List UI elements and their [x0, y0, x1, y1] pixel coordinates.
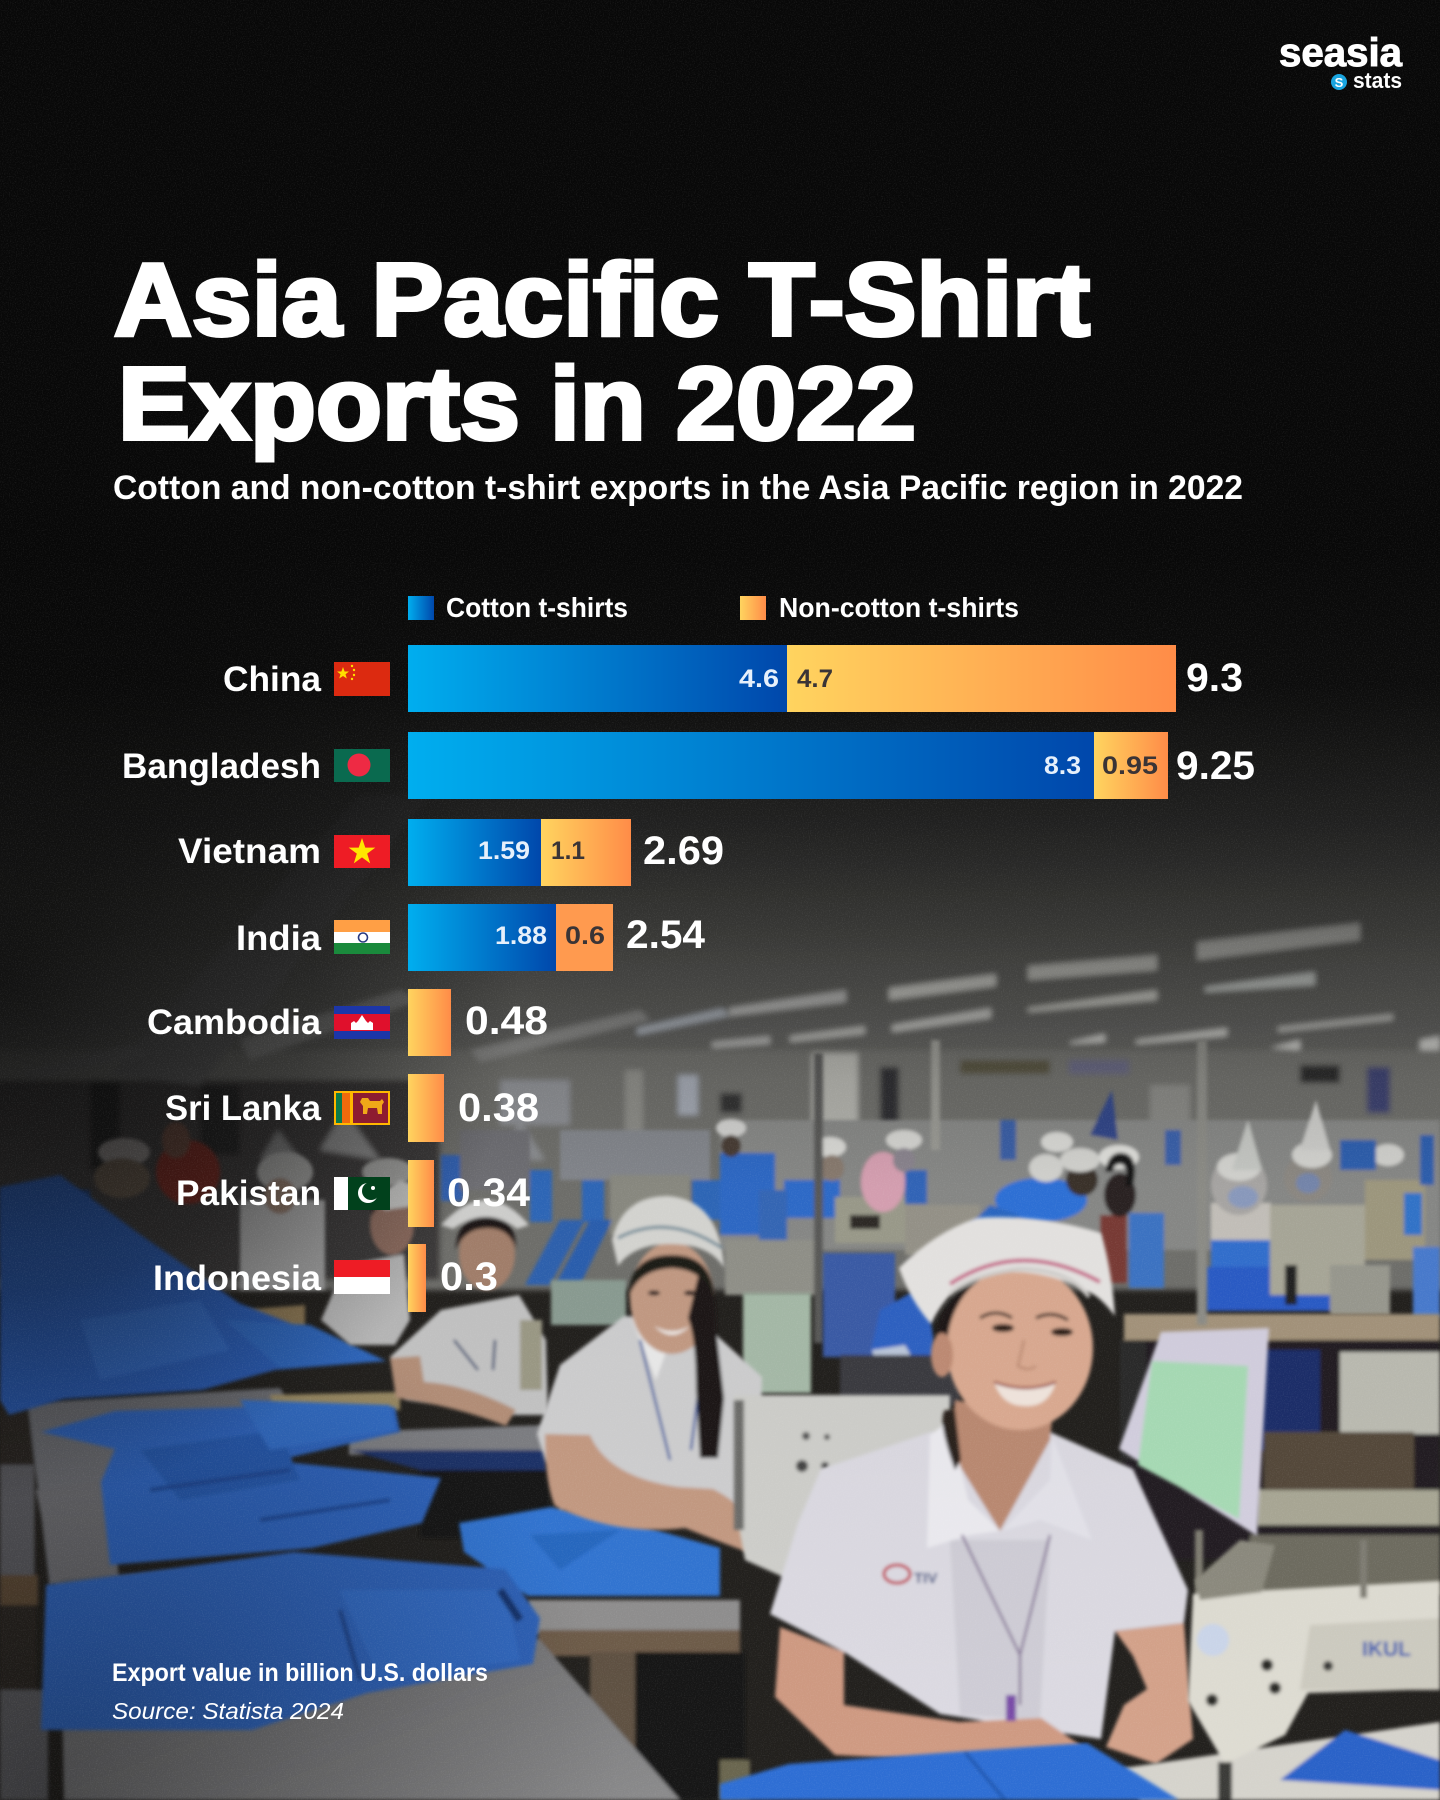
row: Sri Lanka: 0.38	[458, 1086, 539, 1130]
row: Cambodia: 0.48	[465, 999, 548, 1043]
logo: seasia stats: stats	[1353, 68, 1402, 93]
row: China: 4.6	[739, 665, 779, 693]
face	[947, 1266, 1093, 1430]
background rows of workers	[0, 1040, 1440, 1343]
row: Vietnam: 2.69	[643, 829, 724, 873]
row: China	[223, 645, 1243, 712]
main worker	[770, 1217, 1193, 1772]
shirt	[770, 1432, 1188, 1739]
row: Bangladesh: 8.3	[1044, 752, 1081, 780]
row: Cambodia: Cambodia	[147, 1003, 322, 1042]
row: Bangladesh: Bangladesh	[122, 747, 321, 786]
row: India	[236, 904, 706, 971]
stacked bar chart	[122, 645, 1255, 1312]
back-right crowd	[720, 1120, 1440, 1250]
row: Vietnam: 1.1	[551, 837, 585, 865]
flag: Sri Lanka	[334, 1091, 390, 1125]
row: Bangladesh	[122, 732, 1255, 799]
factory ceiling and back wall	[0, 560, 1440, 1290]
flag: Cambodia	[334, 1006, 390, 1039]
row: Pakistan: Pakistan	[176, 1174, 321, 1213]
pale green panels and blue panel behind front workers	[551, 1040, 1440, 1595]
row: Vietnam: Vietnam	[178, 832, 321, 871]
work tables	[0, 1305, 750, 1800]
row: Vietnam: 1.59	[478, 837, 530, 865]
sewing machine front right: IKUL	[1362, 1638, 1411, 1661]
row: Sri Lanka: Sri Lanka	[165, 1089, 322, 1128]
flag: China	[334, 662, 390, 696]
row: India: 1.88	[495, 922, 547, 950]
flag: Pakistan	[334, 1177, 390, 1210]
logo icon: S	[1335, 75, 1344, 90]
row: China: China	[223, 660, 322, 699]
row: Indonesia	[153, 1244, 498, 1312]
sewing machine behind main worker	[734, 1395, 950, 1580]
row: China: 9.3	[1186, 656, 1243, 700]
blue garment foreground	[720, 1743, 1179, 1800]
flag: India	[334, 920, 390, 954]
title: Exports in 2022	[118, 346, 916, 461]
row: India: India	[236, 919, 322, 958]
collar	[927, 1420, 1000, 1548]
row: Pakistan: 0.34	[447, 1171, 531, 1215]
row: Indonesia: 0.3	[440, 1255, 498, 1299]
legend: cotton swatch	[408, 596, 434, 620]
row: Bangladesh: 0.95	[1102, 752, 1158, 780]
flag: Bangladesh	[334, 749, 390, 782]
row: Pakistan	[176, 1160, 531, 1227]
lanyard and pendant	[962, 1535, 1050, 1705]
row: India: 2.54	[626, 913, 706, 957]
sewing machine front right	[1124, 1540, 1440, 1800]
row: Vietnam	[178, 819, 724, 886]
legend: non-cotton label: Non-cotton t-shirts	[779, 592, 1019, 623]
legend: non-cotton swatch	[740, 596, 766, 620]
certificate on pole	[1119, 1328, 1269, 1600]
unit note: Export value in billion U.S. dollars	[112, 1659, 488, 1687]
title: Asia Pacific T-Shirt	[114, 242, 1090, 357]
flag: Indonesia	[334, 1260, 390, 1294]
row: Indonesia: Indonesia	[153, 1259, 322, 1298]
hair	[935, 1276, 1085, 1386]
legend	[408, 592, 1019, 623]
logo: seasia stats: seasia	[1279, 31, 1403, 75]
row: Cambodia	[147, 989, 548, 1056]
hat	[899, 1217, 1115, 1324]
main worker: TIV	[914, 1570, 937, 1587]
arms	[775, 1627, 1119, 1772]
neck	[950, 1400, 1052, 1531]
middle-back workers	[321, 1180, 548, 1426]
row: China: 4.7	[797, 665, 833, 693]
title	[114, 242, 1090, 461]
blue garment piles	[0, 1175, 720, 1730]
shirt logo	[884, 1565, 910, 1583]
row: India: 0.6	[565, 922, 605, 950]
subtitle: Cotton and non-cotton t-shirt exports in the Asia Pacific region in 2022	[113, 469, 1243, 507]
row: Sri Lanka	[165, 1074, 539, 1142]
flag: Vietnam	[334, 835, 390, 868]
middle worker	[537, 1196, 763, 1554]
legend: cotton label: Cotton t-shirts	[446, 592, 628, 623]
source: Source: Statista 2024	[112, 1698, 344, 1724]
row: Bangladesh: 9.25	[1176, 744, 1255, 788]
